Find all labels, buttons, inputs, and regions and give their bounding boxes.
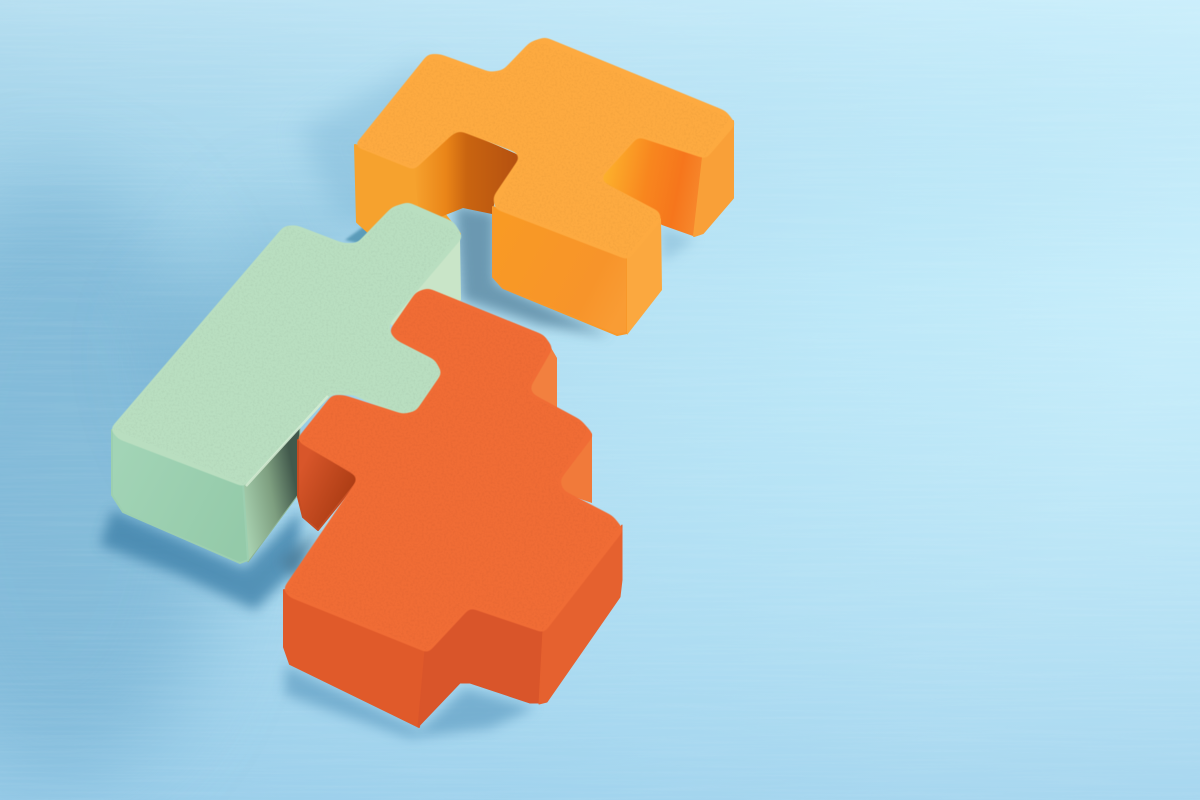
orange puzzle block [354, 37, 736, 335]
green block: upper right side face [388, 237, 461, 340]
red block: front left face [284, 590, 426, 727]
red block: top face [283, 288, 624, 653]
green block: front face [112, 430, 248, 563]
orange block: front corner face [627, 218, 662, 335]
green puzzle block [110, 202, 463, 563]
soft shadows on the table [100, 60, 695, 738]
red block: upper small side face [527, 346, 557, 408]
surface grain on the block tops [303, 80, 714, 594]
red block: middle small side face [557, 433, 592, 503]
green block: top face [110, 202, 463, 487]
orange block: left side face [355, 145, 460, 234]
orange block: right end face [694, 121, 733, 236]
orange block: front face [493, 207, 627, 335]
red block: left notch in shadow [298, 440, 360, 530]
orange block: right notch and end face [598, 135, 705, 236]
orange block: inner left notch [414, 128, 523, 225]
red-orange puzzle block [283, 288, 624, 727]
orange block: top face [354, 37, 736, 260]
red block: right face [539, 525, 622, 704]
green block: lit right edge of the top face [246, 396, 328, 486]
green block: right side face [243, 392, 330, 562]
red block: middle front face [418, 605, 543, 727]
